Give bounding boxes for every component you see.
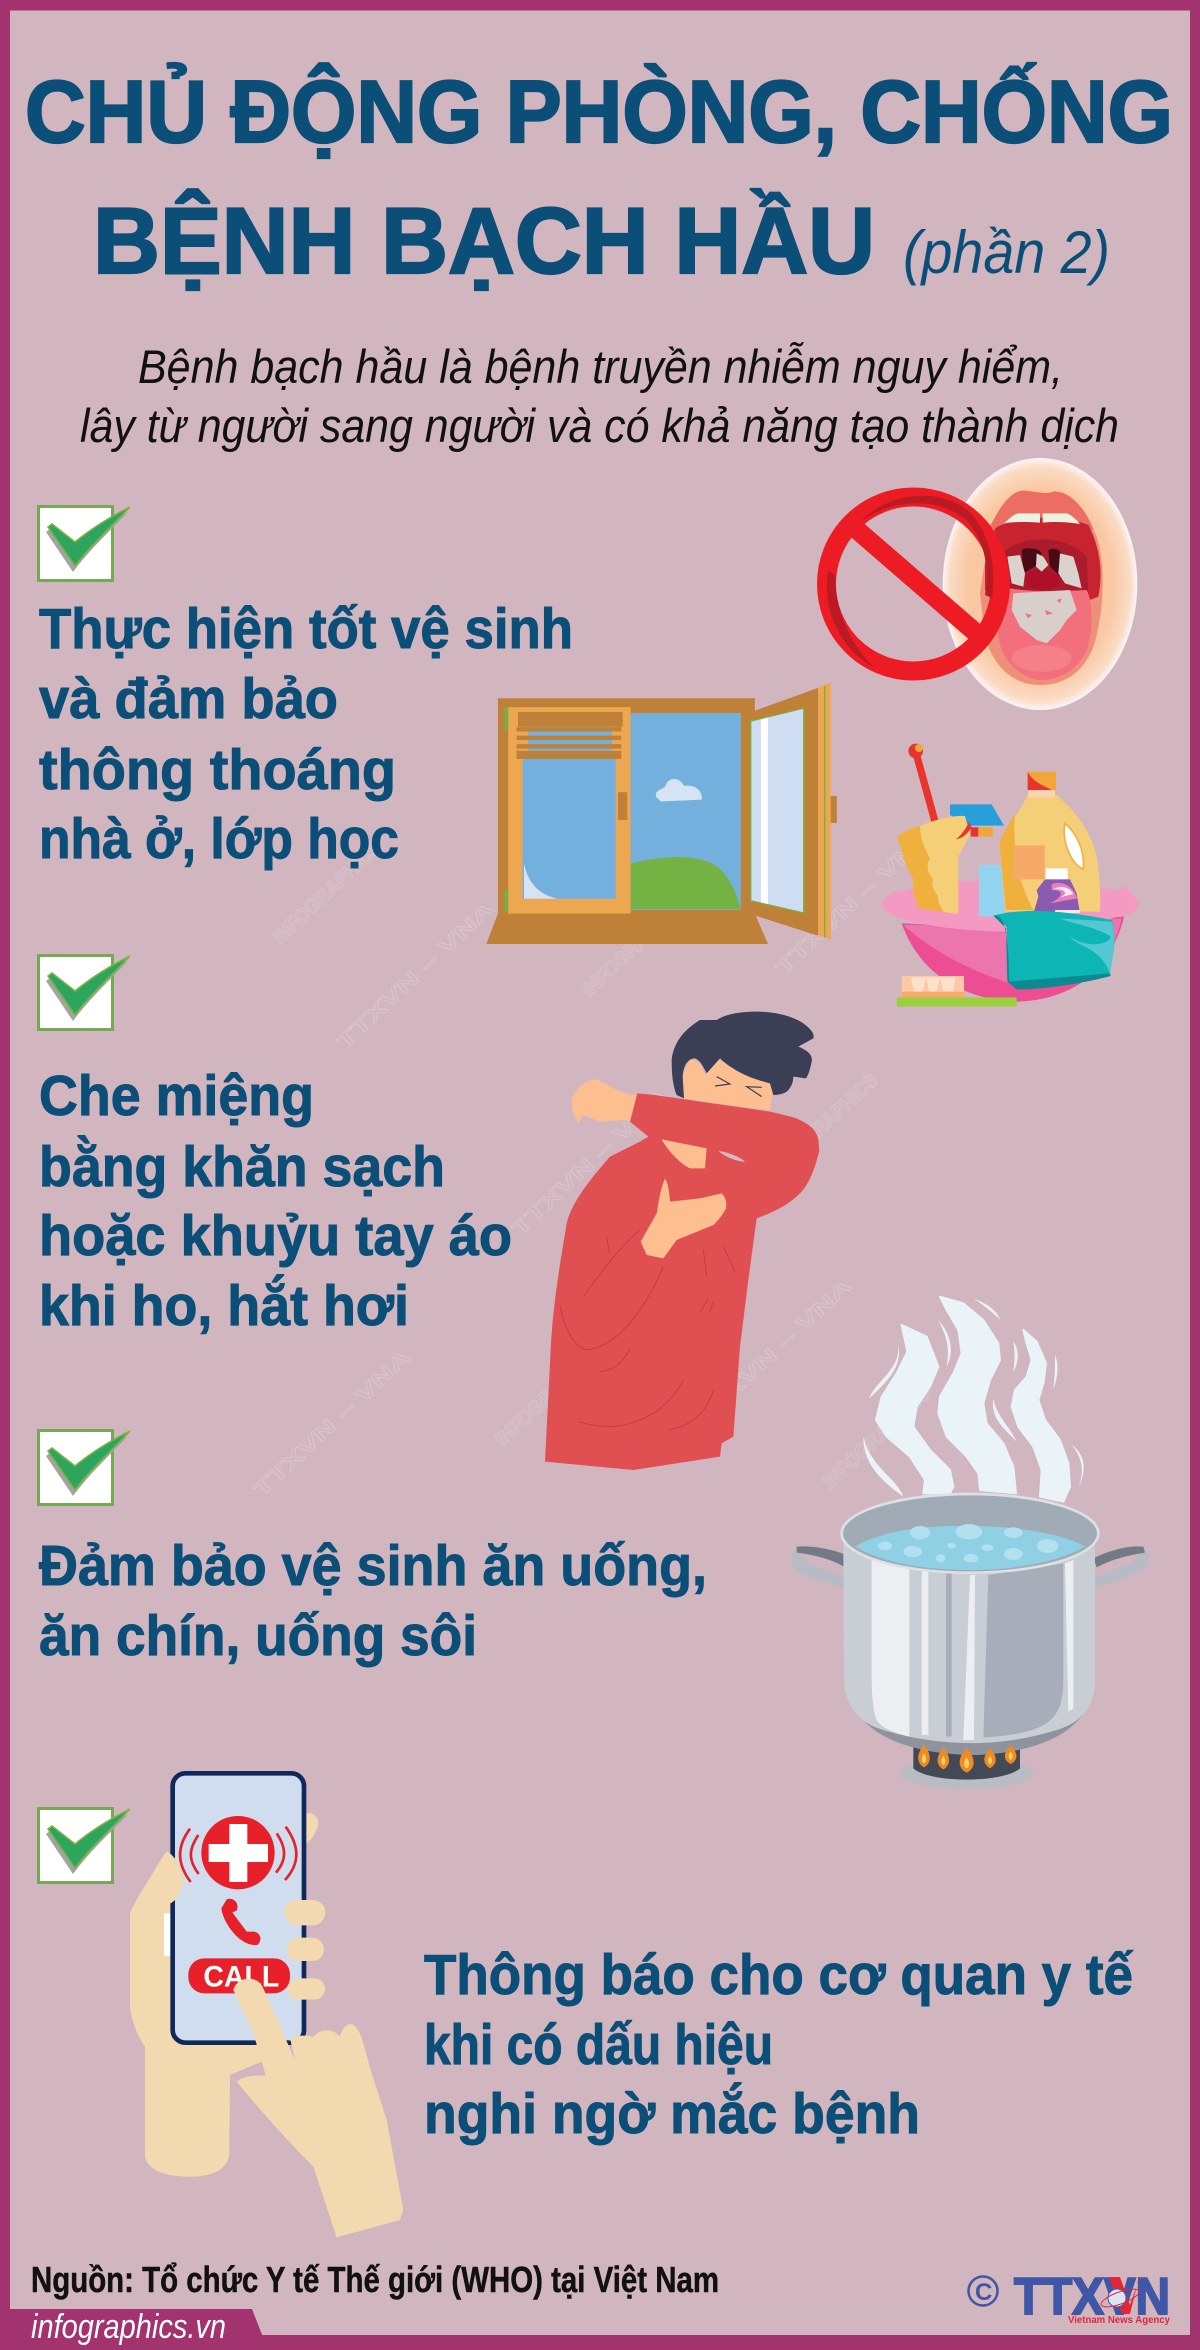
face <box>683 1058 773 1110</box>
phone edge highlight <box>164 1913 171 1956</box>
source line: Nguồn: Tổ chức Y tế Thế giới (WHO) tại Việt Nam <box>31 2259 719 2300</box>
watermarks: TTXVN – VNA <box>333 898 498 1054</box>
step 3 text: ăn chín, uống sôi <box>39 1604 477 1668</box>
flames <box>918 1745 1016 1773</box>
left sash <box>506 707 631 914</box>
window frame <box>486 698 768 944</box>
watermarks: INFOGRAPHICS <box>577 890 695 1002</box>
watermarks: INFOGRAPHICS <box>491 1339 609 1451</box>
step 1 text <box>39 597 573 871</box>
step 2 check box <box>38 956 130 1030</box>
intro text: lây từ người sang người và có khả năng tạo thành dịch <box>80 399 1119 452</box>
hair <box>672 1012 814 1098</box>
big detergent bottle <box>999 772 1100 912</box>
signal arcs <box>180 1827 296 1882</box>
pot body <box>843 1542 1095 1743</box>
step 1 text: thông thoáng <box>39 738 396 802</box>
holding hand <box>130 1852 273 2177</box>
title: (phần 2) <box>903 219 1110 286</box>
watermarks: INFOGRAPHICS <box>765 1069 883 1181</box>
step 3 check box <box>38 1430 130 1504</box>
step 3 text: Đảm bảo vệ sinh ăn uống, <box>39 1534 707 1598</box>
burner <box>900 1745 1033 1789</box>
step 4 check box <box>38 1808 130 1882</box>
logo: TTXVN: Vietnam News Agency <box>1068 2314 1170 2326</box>
step 4 text: khi có dấu hiệu <box>424 2013 773 2077</box>
title: CHỦ ĐỘNG PHÒNG, CHỐNG <box>25 62 1173 161</box>
pointing hand <box>233 1978 403 2237</box>
left handle <box>792 1546 853 1593</box>
back finger <box>306 1813 318 1843</box>
phone <box>173 1773 304 2043</box>
watermarks: TTXVN – VNA <box>508 1085 673 1241</box>
spray bottle <box>950 804 1005 917</box>
website tab: infographics.vn <box>31 2308 226 2346</box>
step 2 text: khi ho, hắt hơi <box>39 1273 409 1338</box>
title <box>25 62 1173 293</box>
step 2 text: Che miệng <box>39 1064 314 1128</box>
steam <box>876 1297 1070 1502</box>
raised fist <box>572 1079 654 1127</box>
icon: hands calling on phone <box>130 1773 403 2237</box>
icon: open window <box>486 682 837 944</box>
neck <box>662 1139 707 1168</box>
step 1 text: và đảm bảo <box>39 667 338 731</box>
watermarks: TTXVN – VNA <box>772 824 937 980</box>
sleeve crease <box>718 1151 745 1162</box>
icon: sore throat mouth with prohibition sign <box>826 458 1137 710</box>
icon: person coughing into elbow <box>545 1012 819 1470</box>
title: BỆNH BẠCH HẦU <box>93 188 875 293</box>
step 4 text: nghi ngờ mắc bệnh <box>424 2081 920 2146</box>
intro text: Bệnh bạch hầu là bệnh truyền nhiễm nguy hiểm, <box>138 340 1063 393</box>
scrub brush <box>897 976 1017 1007</box>
step 2 text: hoặc khuỷu tay áo <box>39 1204 512 1268</box>
teal towel <box>993 911 1114 989</box>
logo: TTXVN: TTXVN <box>1014 2268 1170 2326</box>
step 2 text: bằng khăn sạch <box>39 1134 445 1199</box>
call button: CALL <box>203 1961 279 1994</box>
emergency cross <box>201 1816 275 1889</box>
pot interior <box>842 1494 1098 1573</box>
outside view <box>631 713 741 910</box>
logo: TTXVN: C <box>975 2279 992 2306</box>
watermarks <box>250 824 937 1502</box>
mouth <box>943 458 1137 710</box>
step 3 text <box>39 1534 707 1668</box>
hand on chest <box>641 1178 726 1258</box>
intro text <box>80 340 1119 452</box>
watermarks: TTXVN – VNA <box>691 1275 856 1431</box>
small purple bottle <box>1033 868 1080 914</box>
watermarks: TTXVN – VNA <box>250 1346 415 1502</box>
step 2 text <box>39 1064 512 1338</box>
icon: cleaning supplies in basin <box>882 744 1138 1007</box>
step 4 text: Thông báo cho cơ quan y tế <box>424 1943 1133 2007</box>
closed eyes <box>715 1077 762 1097</box>
step 1 text: Thực hiện tốt vệ sinh <box>39 597 573 661</box>
boiling water <box>855 1524 1085 1570</box>
basin bowl <box>882 887 1138 1002</box>
icon: boiling pot on stove <box>792 1297 1149 1789</box>
step 1 check box <box>38 506 130 580</box>
rubber glove <box>897 816 972 914</box>
basin back <box>882 880 1138 930</box>
right handle <box>1087 1546 1149 1593</box>
steam wisps <box>863 1298 1084 1497</box>
phone handset <box>221 1899 260 1945</box>
fingers <box>284 1900 325 2000</box>
sweater <box>545 1093 819 1470</box>
open sash <box>741 682 837 940</box>
watermarks: INFOGRAPHICS <box>268 837 386 949</box>
mop handle <box>908 744 935 822</box>
watermarks: INFOGRAPHICS <box>818 1382 936 1494</box>
pot bottom shadow <box>858 1713 1083 1755</box>
thumb <box>148 1852 183 1905</box>
step 1 text: nhà ở, lớp học <box>39 807 399 871</box>
step 4 text <box>424 1943 1133 2146</box>
prohibition sign <box>826 496 1000 671</box>
